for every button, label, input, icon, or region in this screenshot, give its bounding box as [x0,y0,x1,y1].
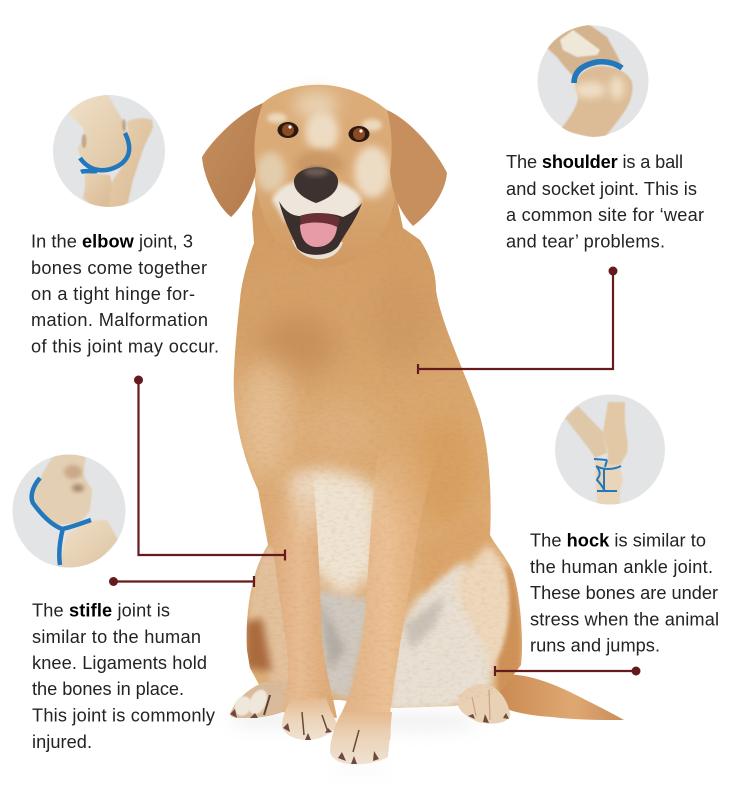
text: hock: runs and jumps. [530,636,660,656]
text: stifle: knee. Ligaments hold [32,653,207,673]
neck shading [258,313,338,377]
text: hock: the human ankle joint. [530,557,713,577]
ground shadow [230,713,480,771]
icon: shoulder joint [538,23,648,140]
text: shoulder: and tear’ problems. [506,232,665,252]
skull [254,85,397,268]
icon: hock joint [555,394,665,506]
text: hock: stress when the animal [530,610,719,630]
eyes [278,122,370,142]
callout line: hock [495,666,640,676]
text: stifle: The stifle joint is [32,600,170,620]
text: elbow: mation. Malformation [31,310,208,330]
text: stifle [32,600,216,752]
icon: elbow joint [53,93,165,210]
left ear [202,103,263,217]
left foreleg [272,476,337,740]
chin [292,240,343,259]
callout line: stifle [109,576,254,587]
nose [294,167,338,203]
rear right paw [457,684,510,724]
right ear [387,110,447,226]
text: stifle: similar to the human [32,627,201,647]
torso and haunches [234,190,522,712]
text: hock: The hock is similar to [530,530,706,550]
text: shoulder: and socket joint. This is [506,179,697,199]
left haunch [248,545,288,682]
text: elbow: of this joint may occur. [31,336,219,356]
fur texture [263,418,508,708]
icon: stifle joint [12,450,126,570]
callout line: elbow [134,376,285,560]
text: stifle: the bones in place. [32,679,184,699]
text: elbow: In the elbow joint, 3 [31,232,193,252]
callout line: shoulder [418,266,618,374]
text: elbow: bones come together [31,258,207,278]
tongue [300,223,337,247]
dog photograph [202,85,624,771]
right haunch [457,545,514,672]
text: shoulder: a common site for ‘wear [506,205,704,225]
tail [497,674,624,720]
mouth [279,201,362,255]
text: elbow [31,232,219,356]
text: stifle: injured. [32,732,92,752]
belly [320,588,366,701]
text: elbow: on a tight hinge for- [31,284,195,304]
text: shoulder: The shoulder is a ball [506,152,683,172]
text: shoulder [506,152,704,252]
toe claws [230,709,509,764]
white chest [288,469,378,600]
right foreleg [330,462,429,764]
text: hock [530,530,719,656]
rear left paw [230,681,296,718]
head [202,85,447,268]
text: stifle: This joint is commonly [32,706,216,726]
text: hock: These bones are under [530,583,718,603]
